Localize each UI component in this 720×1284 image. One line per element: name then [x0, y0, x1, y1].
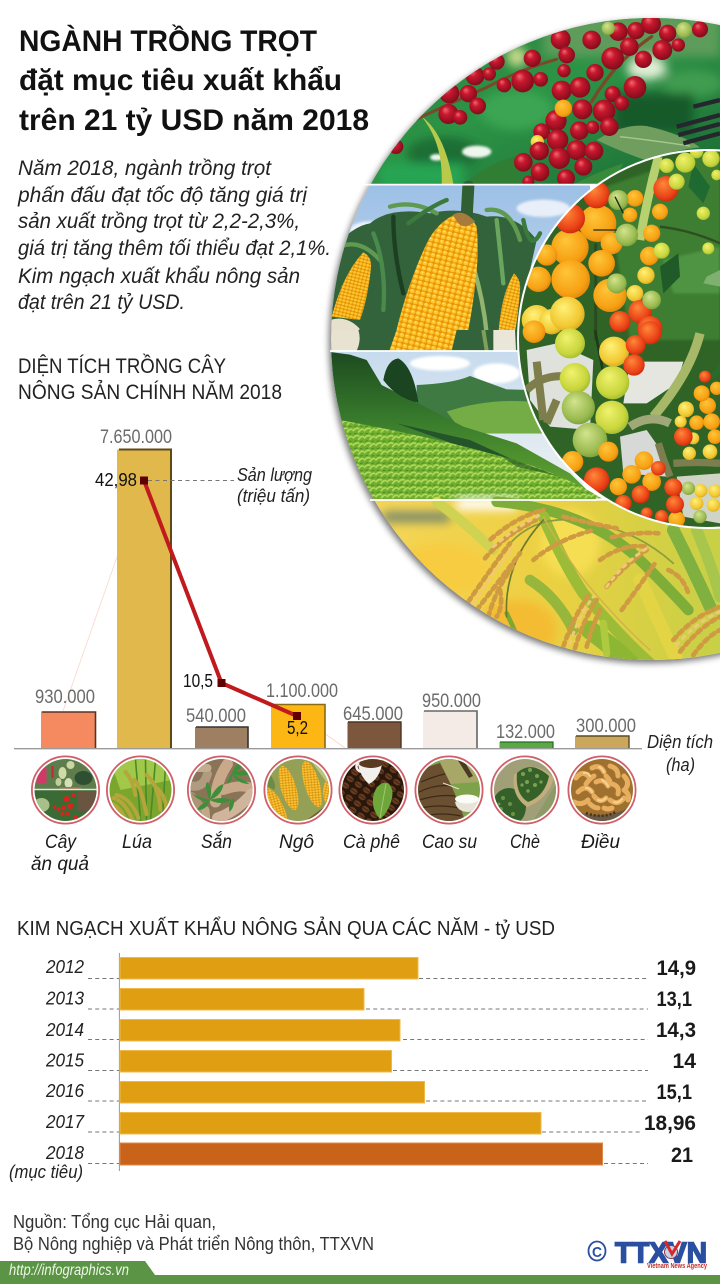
- section heading: planted area: NÔNG SẢN CHÍNH NĂM 2018: [18, 381, 282, 404]
- logo: TTXVN: C: [592, 1244, 602, 1261]
- crop labels: Sắn: [201, 830, 232, 853]
- area value labels: 300.000: [576, 716, 636, 737]
- area value labels: 930.000: [35, 687, 95, 708]
- crop labels: Cây: [45, 831, 77, 853]
- values: 14: [672, 1050, 696, 1073]
- area unit label: (ha): [666, 755, 695, 775]
- year labels: 2012: [45, 956, 85, 977]
- output line: 42,98: [95, 470, 137, 490]
- icon: corn: [260, 756, 333, 829]
- section heading: planted area: [18, 354, 282, 404]
- year labels: 2018: [45, 1142, 85, 1163]
- values: 18,96: [644, 1112, 696, 1135]
- crop labels: Điều: [581, 831, 620, 853]
- area value labels: [35, 427, 636, 743]
- icon: rice: [107, 756, 174, 824]
- area value labels: 7.650.000: [100, 427, 172, 448]
- year labels: 2013: [45, 988, 85, 1008]
- crop labels: Ngô: [279, 831, 314, 853]
- intro text block: phấn đấu đạt tốc độ tăng giá trị: [17, 184, 308, 207]
- crop labels: [31, 830, 620, 875]
- footer bar: [0, 1261, 720, 1284]
- section heading: export turnover: KIM NGẠCH XUẤT KHẨU NÔNG SẢN QUA CÁC NĂM - tỷ USD: [17, 917, 555, 940]
- photo: tomatoes: [518, 145, 720, 528]
- source: Nguồn: Tổng cục Hải quan,: [13, 1212, 216, 1232]
- year labels: 2014: [45, 1019, 84, 1040]
- bars: [41, 450, 629, 748]
- icon: fruit trees: [32, 756, 99, 824]
- icon: tea: [491, 756, 559, 826]
- photo: corn: [330, 185, 590, 352]
- intro text block: [17, 157, 331, 314]
- crop labels: Cao su: [422, 831, 477, 853]
- bars: [120, 958, 602, 1165]
- corn lower part: [330, 330, 517, 351]
- icon: cassava: [188, 756, 255, 824]
- output unit label: [237, 465, 312, 506]
- photo: rice: [370, 498, 720, 667]
- values: 15,1: [656, 1081, 692, 1104]
- output unit label: (triệu tấn): [237, 486, 310, 506]
- crop labels: Chè: [510, 831, 540, 853]
- source: Bộ Nông nghiệp và Phát triển Nông thôn, TTXVN: [13, 1234, 374, 1254]
- area value labels: 950.000: [422, 691, 481, 712]
- year labels: [9, 956, 85, 1182]
- title: trên 21 tỷ USD năm 2018: [19, 104, 369, 137]
- crop labels: ăn quả: [31, 853, 89, 875]
- icon: cashew: [568, 756, 636, 824]
- year labels: 2017: [45, 1111, 85, 1132]
- title: đặt mục tiêu xuất khẩu: [19, 64, 342, 97]
- area value labels: 132.000: [496, 722, 555, 743]
- section heading: planted area: DIỆN TÍCH TRỒNG CÂY: [18, 354, 226, 378]
- leader dashes: [88, 978, 648, 1164]
- icon: coffee: [339, 756, 407, 824]
- bar chart: export turnover: [9, 953, 696, 1182]
- photo dividers: [330, 185, 598, 500]
- values: 21: [671, 1144, 693, 1167]
- values: 14,3: [656, 1019, 696, 1042]
- crop labels: Cà phê: [343, 831, 400, 853]
- crop labels: Lúa: [122, 831, 152, 853]
- title: NGÀNH TRỒNG TRỌT: [19, 24, 317, 58]
- intro text block: Năm 2018, ngành trồng trọt: [18, 157, 272, 180]
- area value labels: 1.100.000: [266, 681, 338, 702]
- footer bar: http://infographics.vn: [9, 1262, 129, 1279]
- intro text block: giá trị tăng thêm tối thiểu đạt 2,1%.: [18, 237, 331, 260]
- output line: 10,5: [183, 671, 213, 691]
- intro text block: sản xuất trồng trọt từ 2,2-2,3%,: [18, 210, 300, 233]
- values: 13,1: [656, 988, 692, 1011]
- chart: planted area and output: [14, 427, 713, 775]
- year labels: 2015: [45, 1050, 85, 1070]
- photo: coffee berries: [371, 18, 720, 184]
- output line: [95, 470, 308, 738]
- icon: rubber: [415, 756, 483, 824]
- source: [13, 1212, 374, 1254]
- photo collage circle: [320, 10, 720, 670]
- year labels: (mục tiêu): [9, 1161, 83, 1182]
- area value labels: 540.000: [186, 706, 246, 727]
- area value labels: 645.000: [343, 704, 403, 725]
- intro text block: đạt trên 21 tỷ USD.: [18, 291, 185, 314]
- output unit label: Sản lượng: [237, 465, 312, 485]
- values: 14,9: [656, 957, 696, 980]
- area unit label: [647, 732, 713, 775]
- year labels: 2016: [45, 1080, 85, 1101]
- photo: tea hills: [330, 351, 602, 500]
- logo: TTXVN: TTXVN: [615, 1238, 707, 1270]
- intro text block: Kim ngạch xuất khẩu nông sản: [18, 265, 300, 288]
- area unit label: Diện tích: [647, 732, 713, 752]
- values: [644, 957, 696, 1167]
- title: [19, 24, 369, 137]
- output line: 5,2: [287, 718, 308, 738]
